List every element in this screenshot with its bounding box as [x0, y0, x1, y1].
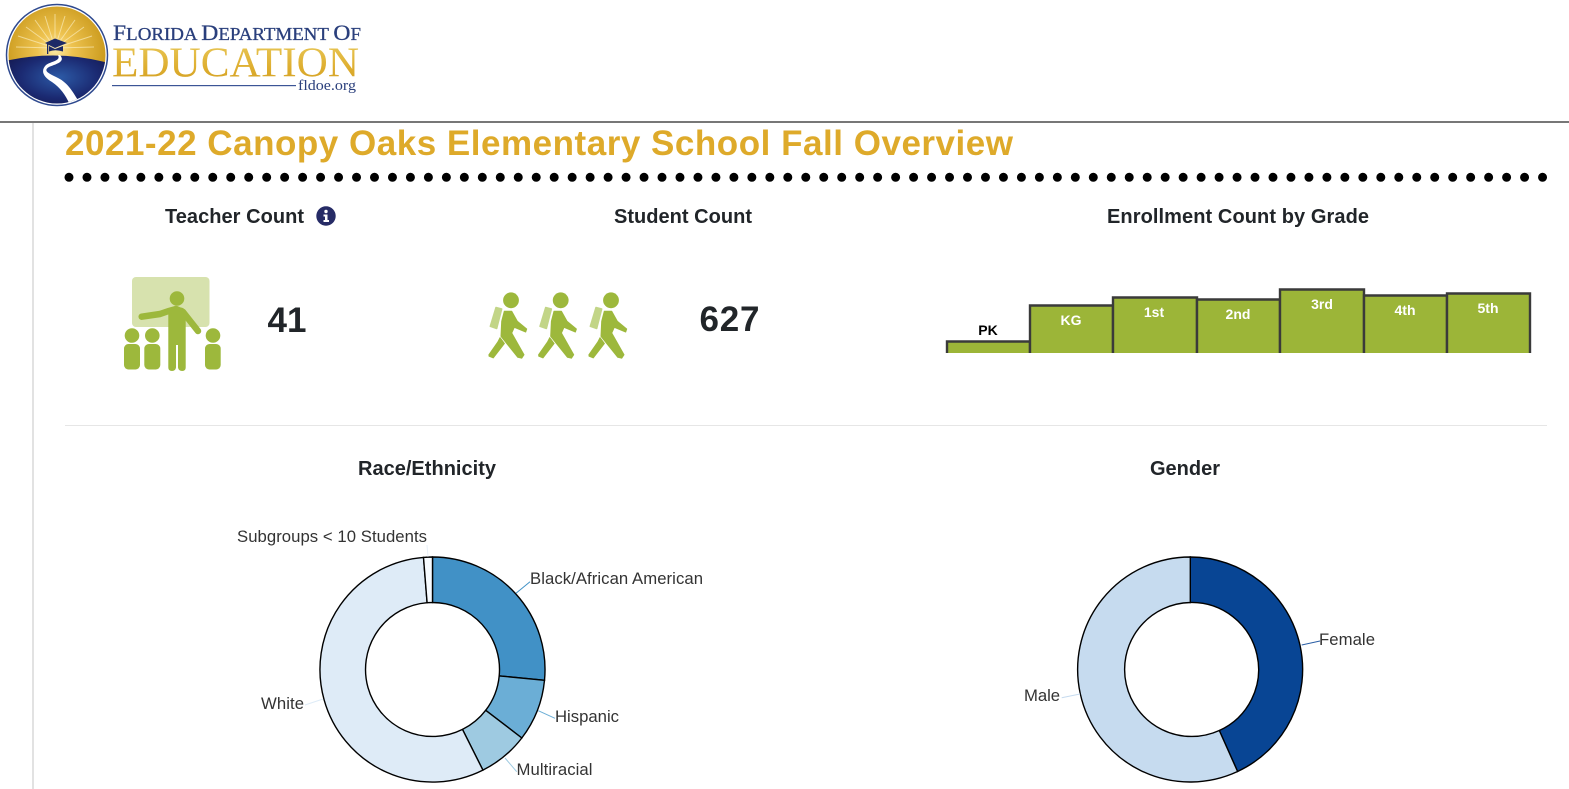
- bar: 1st: 1st: [1144, 304, 1164, 320]
- bar: 5th: [1447, 294, 1530, 353]
- label: Subgroups under 10 Students: Subgroups < 10 Students: [237, 527, 427, 546]
- panel: student count: [489, 206, 760, 358]
- donut chart: gender: [1078, 557, 1303, 782]
- panel: race/ethnicity: [237, 458, 703, 782]
- bar chart: enrollment by grade: [947, 290, 1530, 353]
- heading: teacher count: Teacher Count: [165, 206, 304, 228]
- slice: Black/African American: [432, 557, 545, 680]
- heading: student count: Student Count: [614, 206, 752, 228]
- label: White: White: [261, 694, 304, 713]
- label: Male: Male: [1024, 686, 1060, 705]
- label: Female: Female: [1319, 630, 1375, 649]
- heading: gender: Gender: [1150, 458, 1220, 480]
- icon: walking students: [489, 292, 627, 358]
- value: student count: 627: [700, 300, 760, 339]
- logo wordmark: EDUCATION: [112, 40, 359, 86]
- bar: KG: KG: [1060, 312, 1082, 328]
- bar: 3rd: [1280, 290, 1364, 353]
- logo seal: [5, 4, 109, 110]
- donut chart: race/ethnicity: [320, 557, 545, 782]
- icon: info: [316, 206, 336, 226]
- logo wordmark: [112, 20, 361, 94]
- bar: 3rd: 3rd: [1311, 296, 1333, 312]
- logo wordmark: fldoe.org: [298, 78, 356, 94]
- slice: Hispanic: [486, 676, 544, 738]
- label: Hispanic: Hispanic: [555, 707, 619, 726]
- value: teacher count: 41: [268, 301, 306, 340]
- slice: Multiracial: [462, 710, 522, 770]
- label: White: [261, 694, 323, 713]
- bar: KG: [1030, 306, 1113, 353]
- bar: 1st: [1113, 298, 1197, 353]
- bar: 2nd: [1197, 300, 1280, 353]
- slice: White: [320, 557, 483, 782]
- logo wordmark: FLORIDA DEPARTMENT OF: [113, 20, 361, 45]
- slice: Female: [1190, 557, 1303, 772]
- label: Black/African American: Black/African American: [530, 569, 703, 588]
- header: logo: [5, 4, 361, 110]
- panel: teacher count: [124, 206, 336, 371]
- slice: Subgroups under 10: [424, 557, 432, 603]
- bar: 4th: [1364, 296, 1447, 353]
- panel: gender: [1024, 458, 1375, 782]
- slice: Male: [1078, 557, 1238, 782]
- bar: 4th: 4th: [1394, 302, 1416, 318]
- icon: teacher with students: [124, 277, 221, 371]
- label: Multiracial: Multiracial: [516, 760, 592, 779]
- bar: PK: PK: [978, 322, 998, 338]
- heading: enrollment: Enrollment Count by Grade: [1107, 206, 1369, 228]
- bar: PK: [947, 322, 1030, 353]
- label: Male: [1024, 686, 1080, 705]
- heading: race/ethnicity: Race/Ethnicity: [358, 458, 497, 480]
- bar: 5th: 5th: [1478, 300, 1498, 316]
- panel: enrollment by grade: [947, 206, 1530, 353]
- bar: 2nd: 2nd: [1226, 306, 1250, 322]
- title: 2021-22 Canopy Oaks Elementary School Fall Overview: [65, 124, 1014, 163]
